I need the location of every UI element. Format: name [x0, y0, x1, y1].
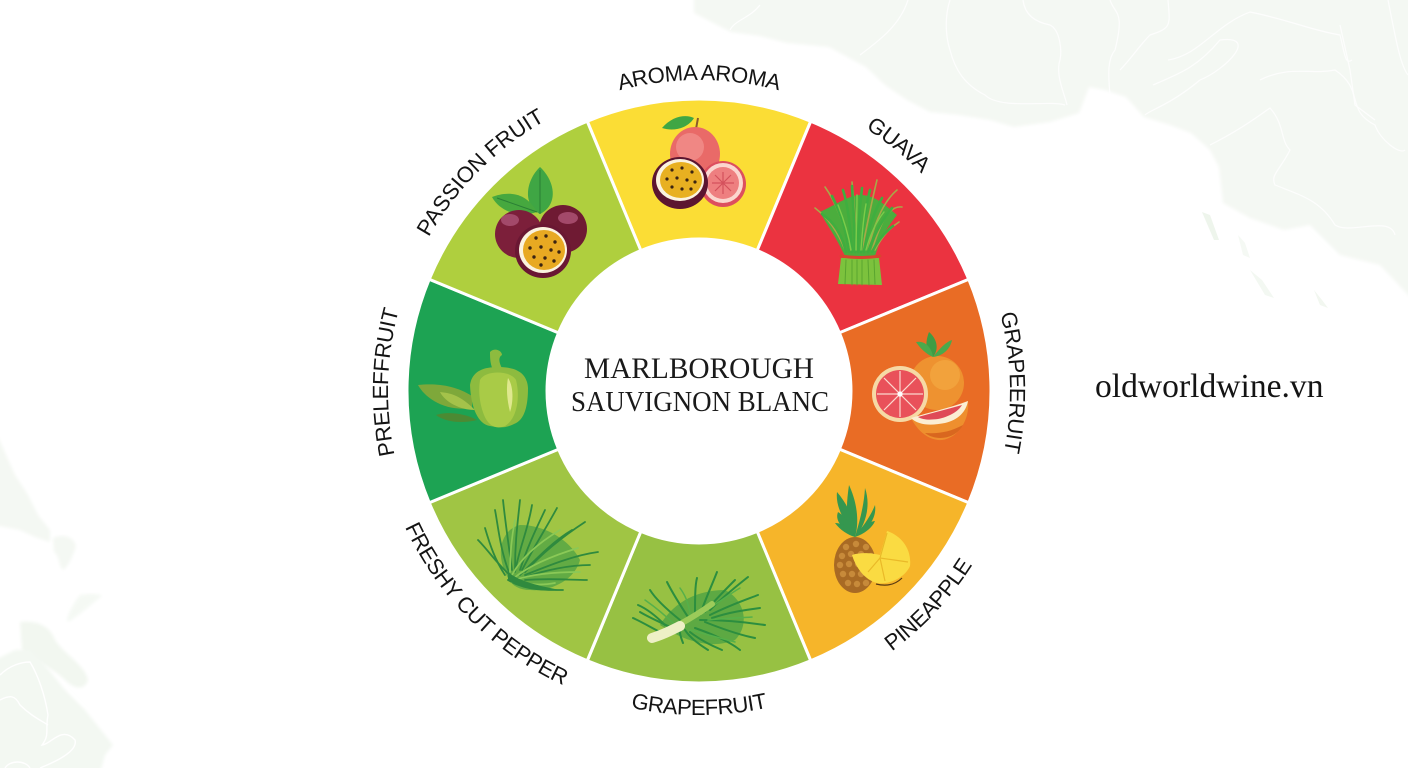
- segment: guava red: [719, 106, 984, 371]
- centre title: SAUVIGNON BLANC: [571, 387, 829, 418]
- label: pineapple: PINEAPPLE: [884, 558, 972, 650]
- flavour wheel: [407, 99, 991, 683]
- centre title: [549, 241, 849, 541]
- label: freshy cut pepper: FRESHY CUT PEPPER: [406, 522, 568, 685]
- label: guava: GUAVA: [869, 118, 928, 174]
- label: passion fruit: PASSION FRUIT: [416, 108, 540, 236]
- icon: green bell pepper with leaves: [418, 350, 528, 427]
- background map: bottom left: [0, 430, 113, 768]
- label: preleffruit: PRELEFFRUIT: [372, 306, 398, 456]
- segment: grapefruit green: [587, 531, 811, 683]
- website credit: oldworldwine.vn: [1095, 368, 1324, 405]
- label: aroma aroma: AROMA AROMA: [620, 64, 779, 90]
- segment: prelef fruit dark green: [407, 279, 559, 503]
- segment: pineapple amber: [719, 411, 984, 676]
- centre title: MARLBOROUGH: [584, 352, 814, 385]
- icon: passion fruit: [492, 167, 587, 278]
- background map: top right: [694, 0, 1408, 308]
- icon: pineapple: [834, 485, 910, 593]
- segment: passion fruit lime: [414, 106, 679, 371]
- icon: lemongrass bundle: [815, 180, 902, 285]
- icon: wild grass tuft: [478, 500, 598, 591]
- icon: grapefruit: [872, 332, 968, 440]
- icon: lemongrass stalk: [633, 572, 765, 650]
- segment: grapefruit orange: [839, 279, 991, 503]
- label: grapefruit: GRAPEFRUIT: [632, 692, 765, 715]
- icon: guava and passion fruit: [652, 116, 746, 209]
- segment: aroma yellow: [587, 99, 811, 251]
- label: grapeeruit: GRAPEERUIT: [1002, 312, 1026, 454]
- segment: fresh cut pepper green: [414, 411, 679, 676]
